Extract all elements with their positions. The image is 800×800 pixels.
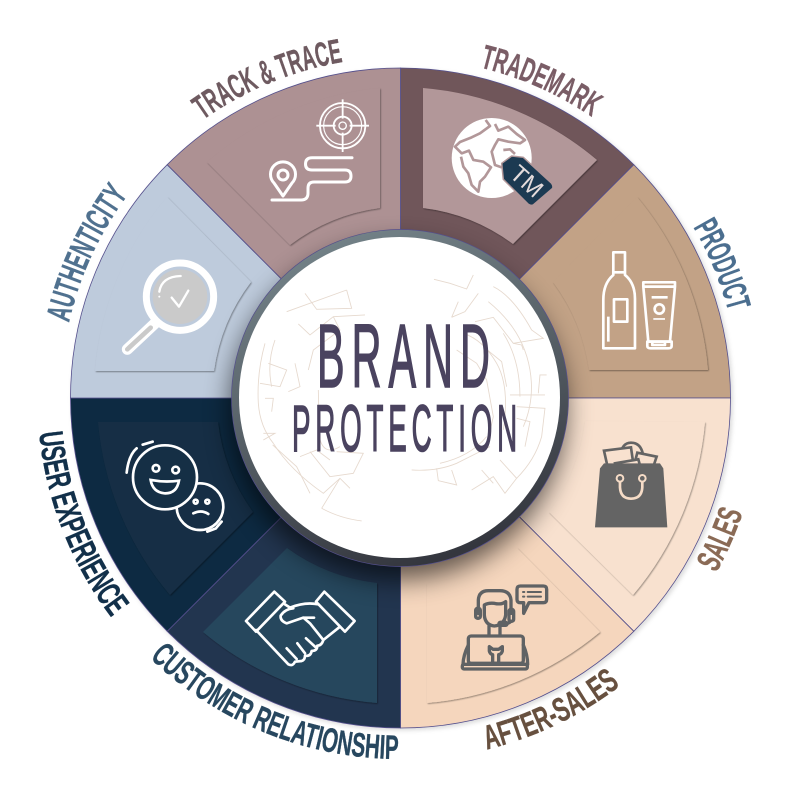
panel: customer relationship inset	[203, 548, 377, 703]
panel: authenticity inset	[95, 197, 251, 371]
icon: handshake	[246, 592, 355, 665]
panel: trademark inset	[423, 88, 597, 244]
panel: user experience inset	[98, 422, 253, 595]
label: user experience: USER EXPERIENCE	[40, 431, 130, 618]
label: product: PRODUCT	[694, 216, 752, 308]
icon: support agent with laptop	[462, 586, 547, 669]
label: authenticity: AUTHENTICITY	[47, 181, 126, 322]
icon: target crosshair	[316, 99, 369, 152]
icon: globe with TM tag	[452, 118, 553, 205]
center circle	[232, 230, 568, 566]
label: trademark: TRADEMARK	[484, 44, 604, 117]
panel: product inset	[553, 197, 708, 370]
label: customer relationship: CUSTOMER RELATIONSHIP	[153, 644, 398, 759]
label: sales: SALES	[698, 507, 742, 570]
panel: after-sales inset	[427, 548, 600, 703]
title: BRAND: BRAND	[317, 306, 490, 406]
panel: sales inset	[549, 421, 705, 595]
label: after-sales: AFTER-SALES	[486, 669, 618, 750]
icon: globe with TM tag: TM	[504, 160, 548, 203]
center drop shadow	[230, 244, 566, 580]
icon: happy and sad faces	[127, 442, 223, 532]
icon: magnifying glass with check	[127, 263, 214, 349]
icon: location pin and route	[270, 158, 352, 200]
panel: track and trace inset	[207, 88, 380, 245]
circuit pattern	[258, 275, 547, 521]
icon: shopping bag	[595, 443, 667, 527]
title: PROTECTION: PROTECTION	[292, 391, 517, 465]
icon: bottle and tube	[603, 252, 675, 348]
wheel segments	[70, 68, 730, 728]
label: track and trace: TRACK & TRACE	[190, 38, 342, 118]
